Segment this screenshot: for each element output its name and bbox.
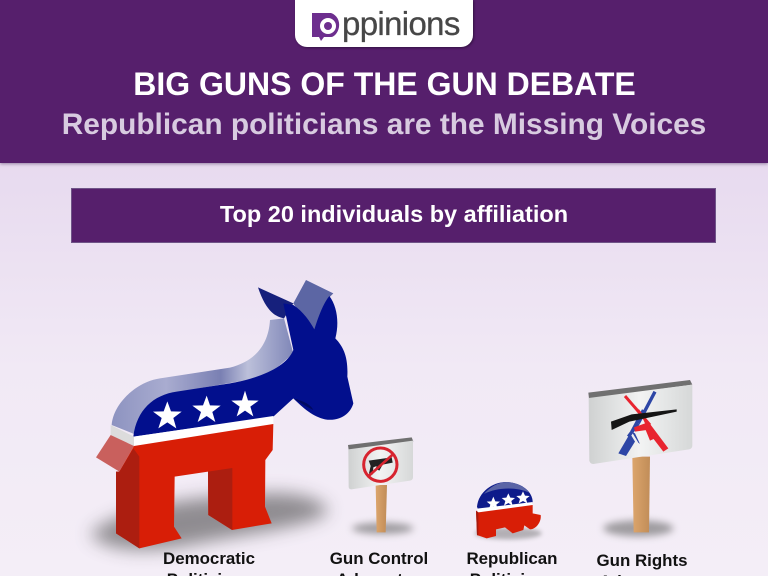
label: gun control advocates: Gun Control — [330, 549, 428, 568]
icon: democratic donkey — [84, 280, 354, 562]
subtitle: Republican politicians are the Missing Voices — [62, 108, 706, 141]
icon: gun rights sign — [588, 380, 692, 536]
section heading band — [71, 188, 716, 243]
icon: gun control sign — [348, 437, 413, 534]
icon: speech bubble — [312, 13, 340, 41]
logo wordmark: ppinions — [342, 5, 460, 42]
label: democratic politicians: Democratic — [163, 549, 255, 568]
label: gun rights advocates: Gun Rights — [596, 551, 688, 570]
signs and elephant — [348, 380, 692, 542]
label: republican politicians: Republican — [466, 549, 558, 568]
title: BIG GUNS OF THE GUN DEBATE — [133, 66, 636, 102]
icon: republican elephant — [475, 482, 542, 539]
section heading text: Top 20 individuals by affiliation — [220, 201, 568, 227]
logo: appinions — [295, 0, 473, 47]
header banner — [0, 0, 768, 163]
